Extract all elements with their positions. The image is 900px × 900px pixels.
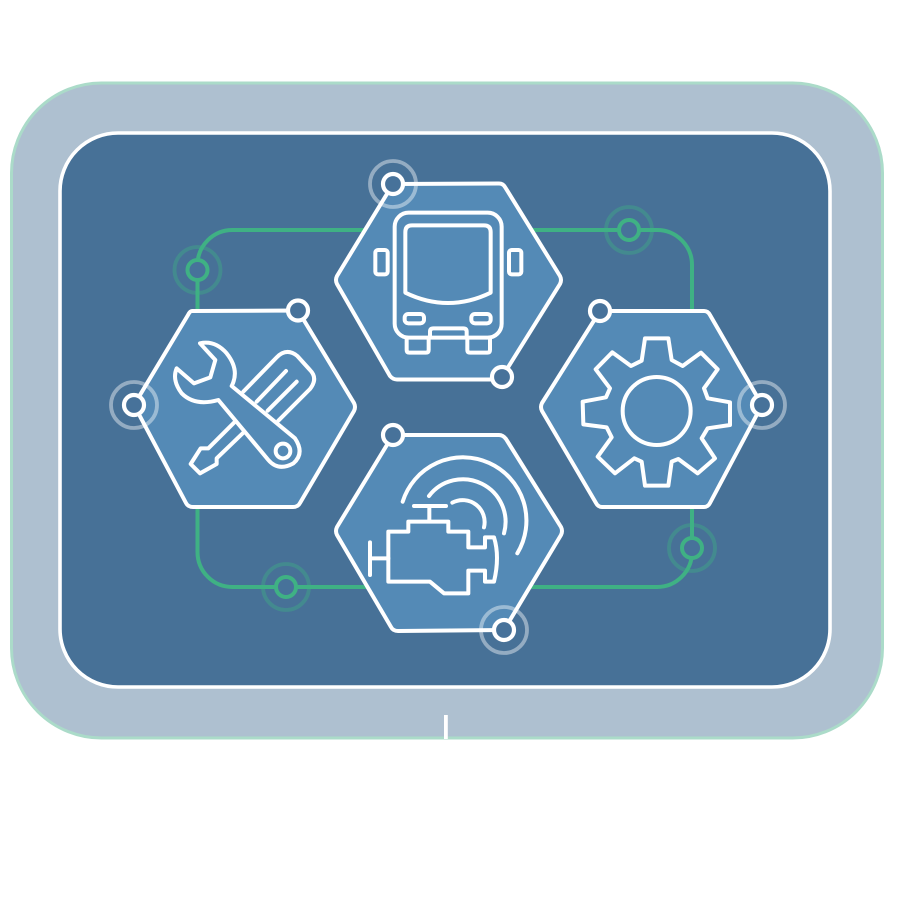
stand tick	[444, 715, 448, 739]
icon: gear	[583, 338, 730, 486]
node: engine bottom-right	[481, 607, 527, 653]
panel: inner screen	[60, 133, 830, 687]
node: green top-left	[174, 247, 220, 293]
panel: bus hexagon	[336, 161, 561, 387]
node: bus top-left	[370, 161, 416, 207]
icon: bus	[375, 213, 521, 353]
panel: engine hexagon	[336, 425, 562, 653]
node: bus bottom-right	[492, 367, 512, 387]
node: tools right	[288, 300, 308, 320]
panel: outer frame	[12, 83, 882, 738]
node: gear right	[739, 382, 785, 428]
node: green top-right	[606, 207, 652, 253]
green connector loop	[198, 230, 692, 587]
node: green bottom-left	[263, 564, 309, 610]
node: green bottom-right	[669, 525, 715, 571]
panel: gear hexagon	[541, 301, 785, 507]
icon: engine with signal	[370, 457, 526, 593]
icon: wrench and screwdriver	[175, 343, 314, 473]
panel: tools hexagon	[111, 300, 355, 507]
node: gear top-left	[590, 301, 610, 321]
node: tools left	[111, 382, 157, 428]
node: engine top-left	[383, 425, 403, 445]
